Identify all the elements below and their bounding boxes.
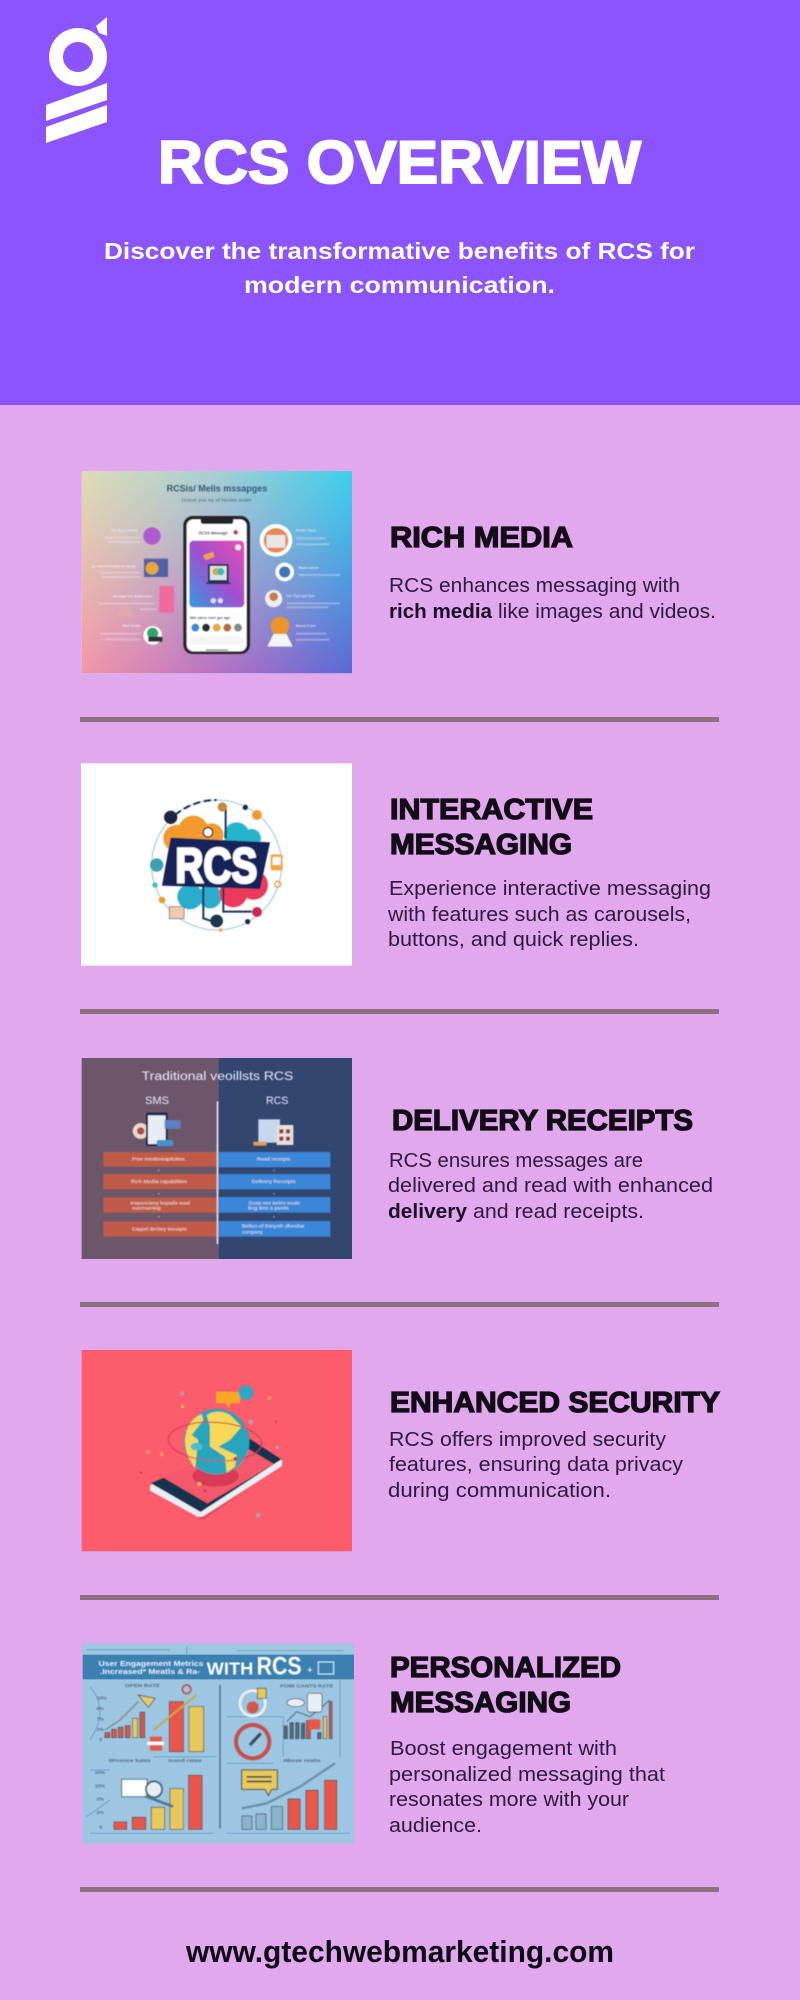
- image: SMS versus RCS comparison: Read receipts: [257, 1157, 290, 1162]
- image: SMS versus RCS comparison: +: [157, 1215, 160, 1220]
- image: user engagement metrics charts: IIBose reatts: [283, 1758, 321, 1764]
- heading: PERSONALIZED: [390, 1652, 621, 1684]
- body text: buttons, and quick replies.: [388, 929, 639, 951]
- panel: enhanced security: [82, 1350, 720, 1551]
- body text: and read receipts.: [473, 1201, 644, 1223]
- heading: MESSAGING: [390, 1687, 571, 1719]
- subtitle: [104, 238, 695, 298]
- image: rich media messages on a phone: Radio Iotoos: [299, 566, 319, 570]
- image: user engagement metrics charts: 2%: [97, 1810, 104, 1816]
- image: user engagement metrics charts: 2%: [97, 1727, 104, 1733]
- image: user engagement metrics charts: OPEN RATE: [125, 1683, 161, 1689]
- panel: rich media: [82, 471, 716, 673]
- image: SMS versus RCS comparison: company: [242, 1229, 264, 1234]
- image: SMS versus RCS comparison: Bellen of thinyxih dhesltar: [242, 1224, 305, 1229]
- panel: delivery receipts: [82, 1058, 713, 1259]
- image: rich media messages on a phone: Mr Select Enrolled of laying: [92, 564, 135, 568]
- image: user engagement metrics charts: 2%: [97, 1797, 104, 1803]
- heading: MESSAGING: [390, 829, 572, 861]
- image: user engagement metrics charts: 20%: [95, 1770, 106, 1776]
- header band: [0, 0, 800, 405]
- body text: delivered and read with enhanced: [388, 1175, 713, 1197]
- body text: RCS ensures messages are: [389, 1150, 643, 1172]
- image: user engagement metrics charts: User Engagement Metrics: [99, 1659, 203, 1668]
- image: rich media messages on a phone: Use Tepenger Ipin: [286, 594, 315, 598]
- image: SMS versus RCS comparison: +: [157, 1191, 160, 1196]
- icon: logo: [46, 17, 107, 143]
- image: rich media messages on a phone: Messape Pro Buttal Ipiter: [113, 594, 153, 598]
- body text: [388, 1150, 713, 1223]
- body text: features, ensuring data privacy: [389, 1454, 683, 1476]
- image: user engagement metrics charts: .Increased* Meatls & Ra-: [100, 1667, 200, 1676]
- body text: [389, 1738, 665, 1837]
- image: user engagement metrics charts: +: [307, 1665, 312, 1675]
- body text: like images and videos.: [498, 601, 716, 623]
- image: SMS versus RCS comparison: +: [273, 1191, 276, 1196]
- image: user engagement metrics charts: IIPconce kates: [109, 1758, 151, 1764]
- heading: ENHANCED SECURITY: [390, 1387, 720, 1419]
- image: rich media messages on a phone: Hosus you try of Neries onder: [182, 497, 252, 502]
- body text: rich media: [389, 601, 493, 623]
- subtitle: modern communication.: [244, 272, 555, 298]
- image: user engagement metrics charts: 0: [99, 1737, 102, 1743]
- body text: during communication.: [388, 1480, 611, 1502]
- image: rich media messages on a phone: The Spen Iveriod: [111, 529, 137, 533]
- image: SMS versus RCS comparison: Pree meslsneapilcities: [132, 1157, 185, 1162]
- subtitle: Discover the transformative benefits of RCS for: [104, 238, 695, 264]
- body text: Experience interactive messaging: [389, 878, 711, 900]
- image: user engagement metrics charts: 7%: [97, 1717, 104, 1723]
- image: rich media messages on a phone: RCSS Message: [199, 531, 228, 536]
- body text: [387, 878, 711, 951]
- image: SMS versus RCS comparison: +: [273, 1168, 276, 1173]
- image: SMS versus RCS comparison: [82, 1058, 352, 1259]
- heading: [390, 1652, 621, 1719]
- body text: delivery: [388, 1201, 468, 1223]
- image: SMS versus RCS comparison: +: [273, 1215, 276, 1220]
- image: SMS versus RCS comparison: Cappel declary ireceipts: [132, 1227, 187, 1232]
- image: rich media messages on a phone: Wed Goube: [122, 624, 141, 628]
- heading: [390, 794, 593, 861]
- image: RCS logo with clouds: [81, 763, 352, 966]
- image: SMS versus RCS comparison: Delivery Receipts: [252, 1179, 296, 1184]
- image: user engagement metrics charts: WITH: [207, 1659, 253, 1679]
- heading: DELIVERY RECEIPTS: [392, 1105, 693, 1137]
- image: rich media messages on a phone: Perfier Goon: [296, 529, 316, 533]
- image: rich media messages on a phone: [82, 471, 352, 673]
- image: SMS versus RCS comparison: SMS: [145, 1095, 169, 1107]
- body text: [388, 1429, 683, 1502]
- image: user engagement metrics charts: 6: [99, 1825, 102, 1831]
- image: user engagement metrics charts: [83, 1643, 354, 1843]
- panel: interactive messaging: [81, 763, 711, 966]
- title: RCS OVERVIEW: [158, 129, 641, 196]
- image: user engagement metrics charts: Icand rates: [168, 1758, 202, 1764]
- image: SMS versus RCS comparison: cuemsering: [132, 1205, 161, 1210]
- panel: personalized messaging: [83, 1643, 665, 1843]
- image: user engagement metrics charts: 8%: [97, 1706, 104, 1712]
- body text: resonates more with your: [389, 1789, 629, 1811]
- body text: with features such as carousels,: [387, 904, 691, 926]
- page background: [0, 405, 800, 2000]
- heading: INTERACTIVE: [390, 794, 593, 826]
- image: rich media messages on a phone: RCSis/ Melis mssapges: [167, 484, 267, 494]
- image: user engagement metrics charts: 10%: [95, 1783, 106, 1789]
- image: SMS versus RCS comparison: +: [157, 1168, 160, 1173]
- image: rich media messages on a phone: Bisole Il heri: [296, 624, 316, 628]
- footer website: www.gtechwebmarketing.com: [185, 1934, 614, 1969]
- image: RCS logo with clouds: RCS: [175, 838, 257, 893]
- body text: RCS enhances messaging with: [389, 575, 680, 597]
- image: SMS versus RCS comparison: Insponcieny bopaifs read: [130, 1200, 190, 1205]
- image: rich media messages on a phone: Wer plece mert gar age: [190, 615, 231, 620]
- body text: RCS offers improved security: [389, 1429, 666, 1451]
- body text: audience.: [389, 1815, 482, 1837]
- image: SMS versus RCS comparison: RCS: [266, 1095, 289, 1107]
- body text: [389, 575, 716, 623]
- image: SMS versus RCS comparison: Rich Media capabilities: [131, 1179, 187, 1184]
- image: globe above a phone: [82, 1350, 352, 1551]
- heading: RICH MEDIA: [390, 522, 573, 554]
- body text: personalized messaging that: [389, 1764, 665, 1786]
- image: user engagement metrics charts: POMI CANTS RATE: [280, 1683, 334, 1689]
- image: SMS versus RCS comparison: Traditional veoillsts RCS: [142, 1069, 293, 1083]
- body text: Boost engagement with: [390, 1738, 617, 1760]
- image: SMS versus RCS comparison: Gosp ves welcn soute: [249, 1200, 301, 1205]
- image: user engagement metrics charts: 10%: [97, 1695, 107, 1701]
- image: SMS versus RCS comparison: fing timi o penls: [248, 1205, 289, 1210]
- image: user engagement metrics charts: RCS: [257, 1653, 302, 1681]
